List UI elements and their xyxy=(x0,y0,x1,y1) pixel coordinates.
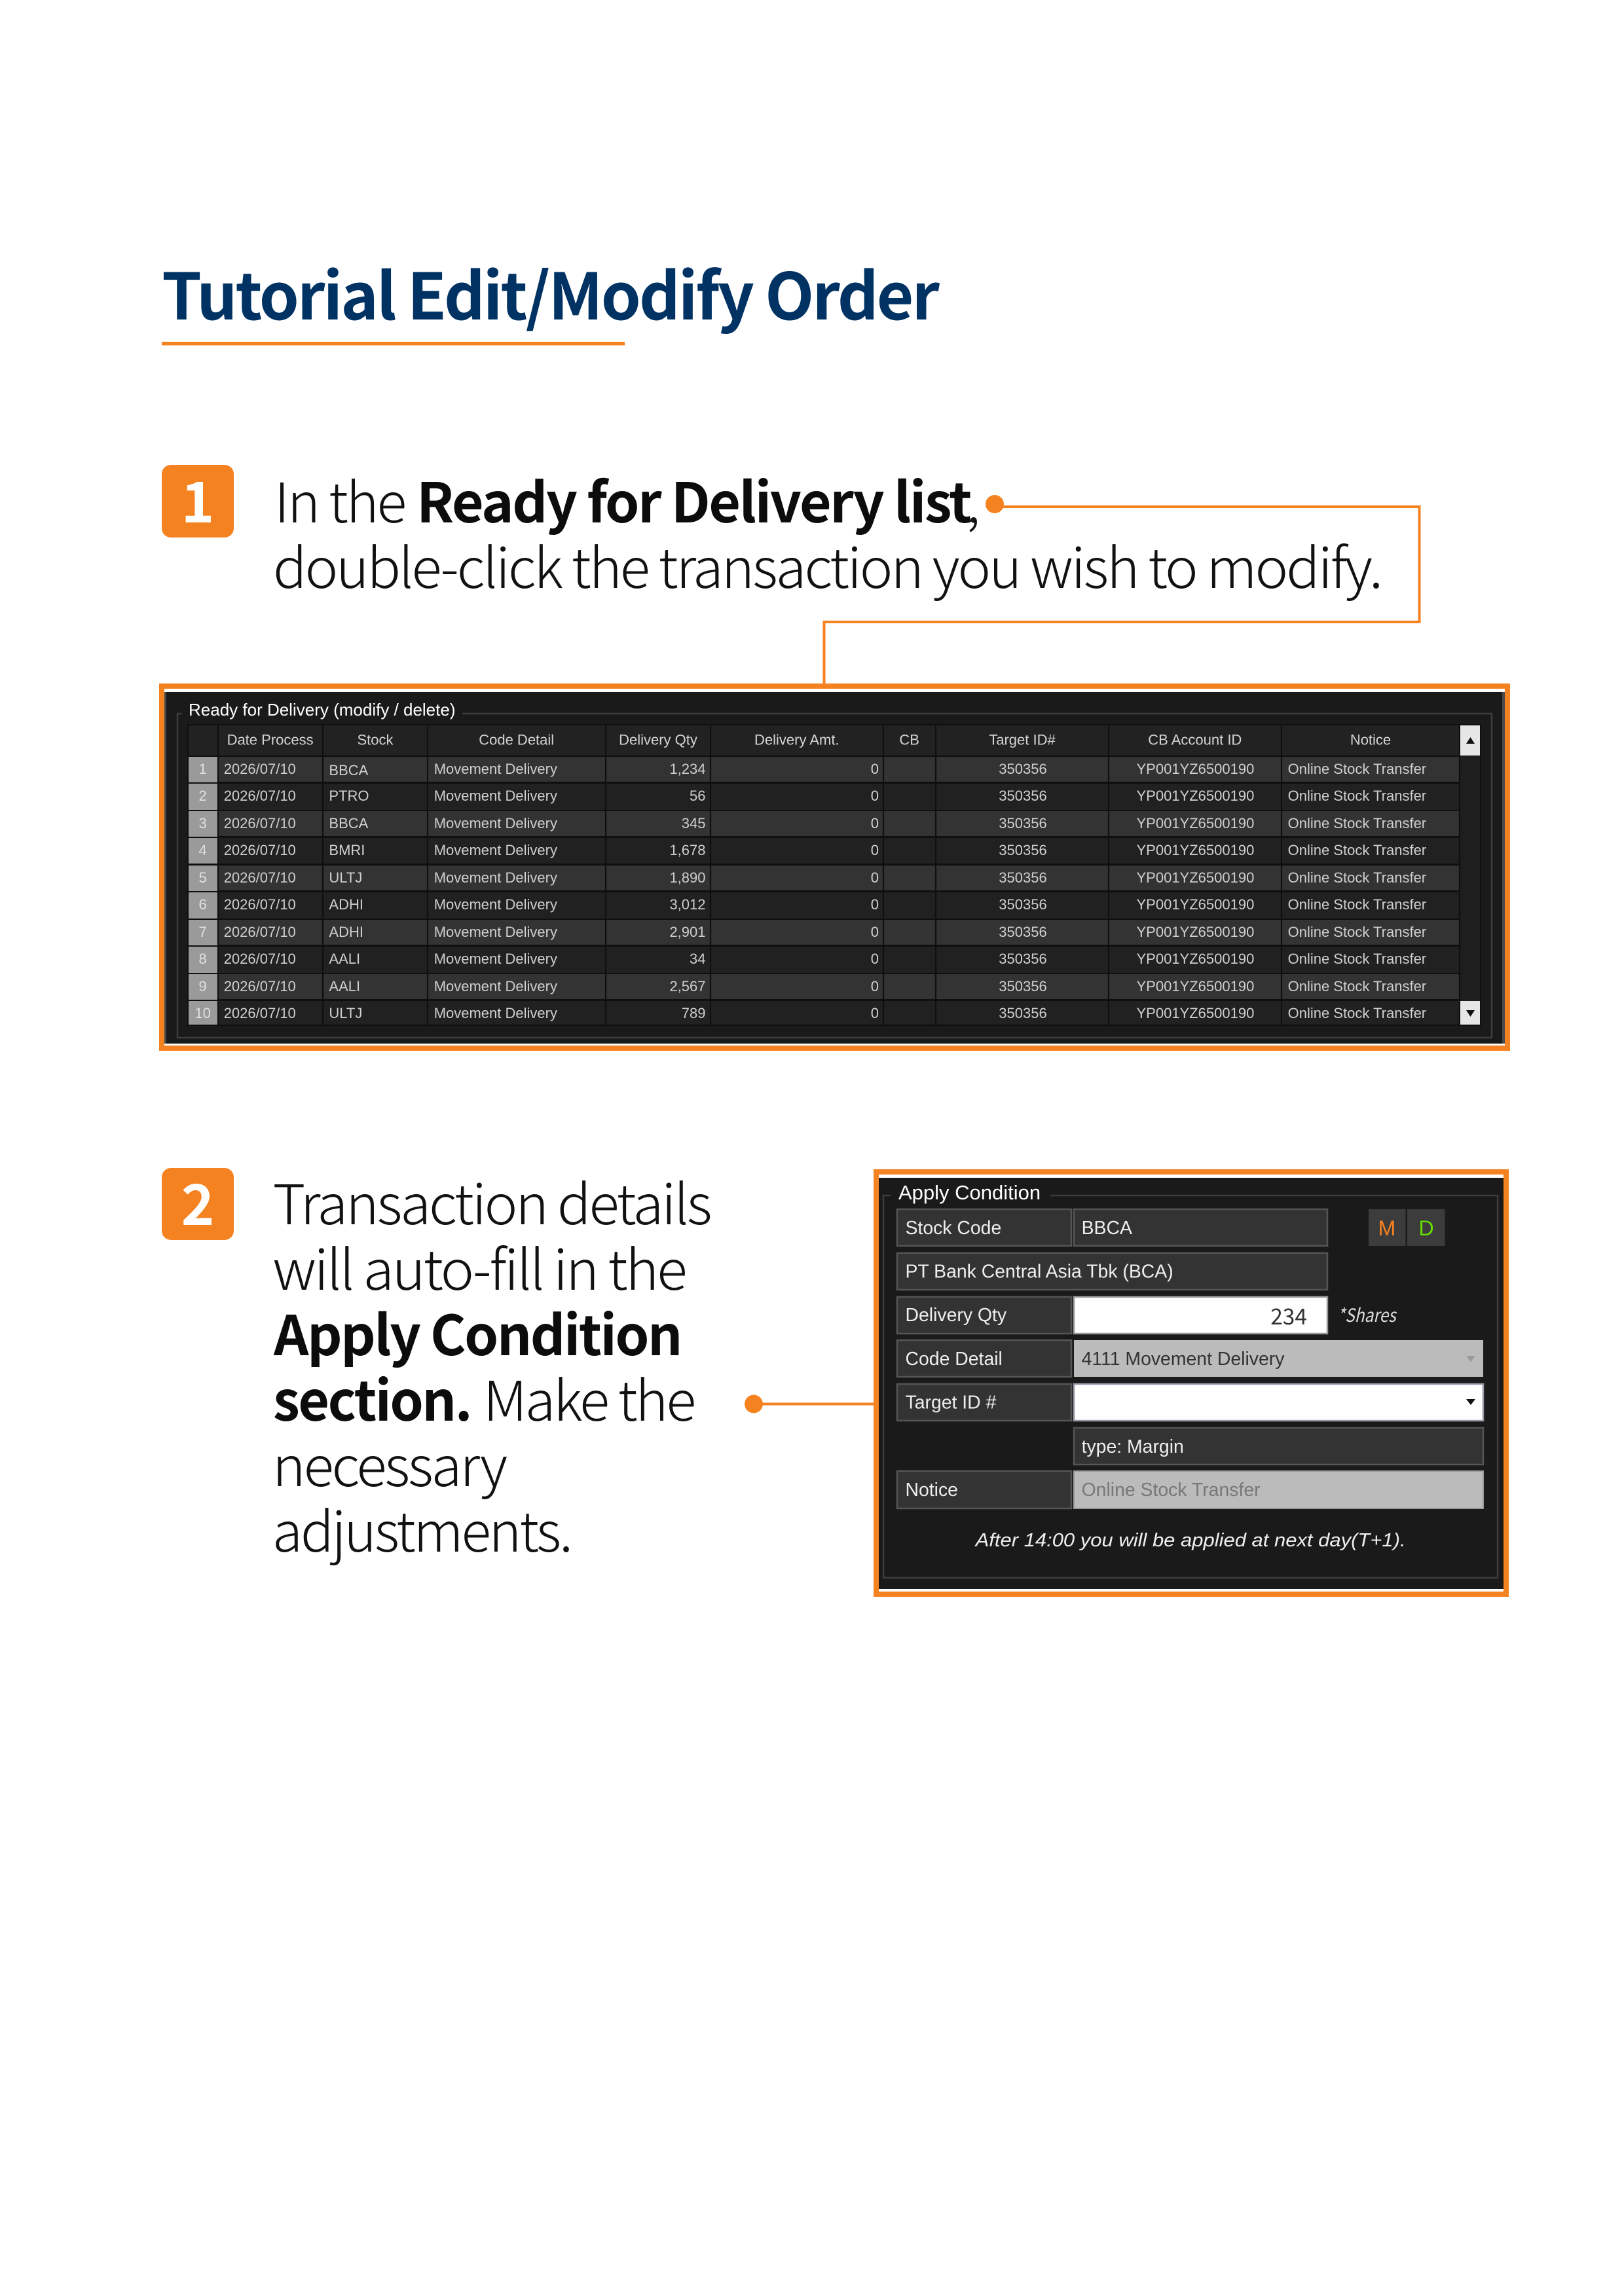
table row 8: 8 xyxy=(198,951,207,967)
table row 4 xyxy=(198,842,1426,858)
table header: CB xyxy=(899,732,919,748)
table row 4: 1,678 xyxy=(669,842,706,858)
table row 3: BBCA xyxy=(329,815,369,831)
arrow: connector from step 2 text to apply condition panel xyxy=(745,1394,874,1413)
table row 3: 345 xyxy=(682,815,706,831)
table row 5: 5 xyxy=(198,869,207,886)
table row 5 xyxy=(198,869,1426,886)
step 2 instruction text: adjustments. xyxy=(272,1489,571,1568)
title: Tutorial Edit/Modify Order xyxy=(162,246,940,338)
table row 9: AALI xyxy=(329,978,360,994)
table row 1: YP001YZ6500190 xyxy=(1136,761,1254,777)
table header: Delivery Qty xyxy=(619,732,697,748)
table row 8: 0 xyxy=(871,951,879,967)
table row 4: Movement Delivery xyxy=(434,842,557,858)
panel heading: Ready for Delivery (modify / delete) xyxy=(189,700,455,720)
table row 6: 0 xyxy=(871,896,879,913)
step 1 instruction text xyxy=(273,460,1381,604)
table row 3: 2026/07/10 xyxy=(224,815,296,831)
field: delivery qty: 234 xyxy=(1270,1299,1307,1331)
table row 9: 350356 xyxy=(999,978,1047,994)
table row 7: Online Stock Transfer xyxy=(1288,924,1426,940)
table row 4: 0 xyxy=(871,842,879,858)
table row 2: 350356 xyxy=(999,788,1047,804)
table row 1: 2026/07/10 xyxy=(224,761,296,777)
table row 10 xyxy=(194,1005,1426,1021)
table row 1: 350356 xyxy=(999,761,1047,777)
table row 9: 0 xyxy=(871,978,879,994)
table row 8: 34 xyxy=(690,951,706,967)
arrow: connector from step 1 text to delivery list xyxy=(824,495,1420,683)
table row 7: Movement Delivery xyxy=(434,924,557,940)
table row 4: 2026/07/10 xyxy=(224,842,296,858)
table row 5: ULTJ xyxy=(329,869,362,886)
table row 2 xyxy=(198,788,1426,804)
table row 2: 2 xyxy=(198,788,207,804)
table row 2: 56 xyxy=(690,788,706,804)
table row 2: Online Stock Transfer xyxy=(1288,788,1426,804)
table row 7: YP001YZ6500190 xyxy=(1136,924,1254,940)
table row 1: Movement Delivery xyxy=(434,761,557,777)
table xyxy=(187,724,1481,1026)
step 2 instruction text: Make the xyxy=(483,1358,694,1437)
form fields xyxy=(897,1209,1483,1508)
table row 5: Online Stock Transfer xyxy=(1288,869,1426,886)
field: stock code: Stock Code xyxy=(905,1218,1001,1239)
icon: scroll up button xyxy=(1460,725,1480,756)
table row 6: 350356 xyxy=(999,896,1047,913)
table row 7: 2026/07/10 xyxy=(224,924,296,940)
table row 9: 2026/07/10 xyxy=(224,978,296,994)
step 1 instruction text: , xyxy=(967,460,978,539)
table header: Delivery Amt. xyxy=(754,732,840,748)
table row 2: YP001YZ6500190 xyxy=(1136,788,1254,804)
table header xyxy=(227,732,1391,748)
table row 10: 10 xyxy=(194,1005,211,1021)
table row 3: 3 xyxy=(198,815,207,831)
table row 9: 2,567 xyxy=(669,978,706,994)
table row 10: 0 xyxy=(871,1005,879,1021)
field: stock code: BBCA xyxy=(1082,1218,1132,1239)
table row 4: BMRI xyxy=(329,842,365,858)
step 1 instruction text: Ready for Delivery list xyxy=(416,460,971,539)
step 1 instruction text: double-click the transaction you wish to modify. xyxy=(273,525,1381,604)
table header: CB Account ID xyxy=(1148,732,1242,748)
panel: apply condition xyxy=(874,1169,1509,1597)
table row 7: 7 xyxy=(198,924,207,940)
step 2 instruction text: Transaction details xyxy=(272,1161,710,1241)
table row 4: 350356 xyxy=(999,842,1047,858)
table row 6: Movement Delivery xyxy=(434,896,557,913)
table row 3: 0 xyxy=(871,815,879,831)
field: delivery qty: Delivery Qty xyxy=(905,1305,1007,1326)
step 1 instruction text: In the xyxy=(274,460,405,539)
table row 7: ADHI xyxy=(329,924,363,940)
table row 6: 3,012 xyxy=(669,896,706,913)
step 2 instruction text: section. xyxy=(273,1358,471,1437)
table row 2: 2026/07/10 xyxy=(224,788,296,804)
field: notice: Online Stock Transfer xyxy=(1082,1480,1261,1501)
footnote: After 14:00 you will be applied at next day(T+1). xyxy=(974,1530,1406,1551)
table row 9: Online Stock Transfer xyxy=(1288,978,1426,994)
table row 8: 350356 xyxy=(999,951,1047,967)
field: delivery qty xyxy=(897,1297,1397,1334)
table row 6 xyxy=(198,896,1426,913)
table row 2: PTRO xyxy=(329,788,369,804)
table row 5: 2026/07/10 xyxy=(224,869,296,886)
table row 1: 1,234 xyxy=(669,761,706,777)
table row 3 xyxy=(198,815,1426,831)
icon: scroll down button xyxy=(1460,1001,1480,1025)
table row 9: 9 xyxy=(198,978,207,994)
table row 8: AALI xyxy=(329,951,360,967)
table row 10: YP001YZ6500190 xyxy=(1136,1005,1254,1021)
table row 9: YP001YZ6500190 xyxy=(1136,978,1254,994)
table row 10: ULTJ xyxy=(329,1005,362,1021)
table header: Notice xyxy=(1350,732,1391,748)
table row 8: 2026/07/10 xyxy=(224,951,296,967)
step 2 instruction text: Apply Condition xyxy=(273,1292,681,1372)
table row 2: 0 xyxy=(871,788,879,804)
table row 6: YP001YZ6500190 xyxy=(1136,896,1254,913)
table row 1: Online Stock Transfer xyxy=(1288,761,1426,777)
step 1 badge xyxy=(162,457,234,539)
buttons: M and D: D xyxy=(1418,1216,1434,1240)
table row 5: YP001YZ6500190 xyxy=(1136,869,1254,886)
table row 3: 350356 xyxy=(999,815,1047,831)
table header: Code Detail xyxy=(479,732,554,748)
table row 2: Movement Delivery xyxy=(434,788,557,804)
table row 3: YP001YZ6500190 xyxy=(1136,815,1254,831)
table row 10: Movement Delivery xyxy=(434,1005,557,1021)
field: notice xyxy=(897,1471,1483,1508)
step 2 badge xyxy=(162,1159,234,1241)
table row 3: Online Stock Transfer xyxy=(1288,815,1426,831)
table row 5: 350356 xyxy=(999,869,1047,886)
table row 1 xyxy=(198,761,1426,778)
table row 1: 0 xyxy=(871,761,879,777)
panel heading: Apply Condition xyxy=(898,1181,1041,1204)
table row 10: Online Stock Transfer xyxy=(1288,1005,1426,1021)
table row 10: 2026/07/10 xyxy=(224,1005,296,1021)
field: type margin xyxy=(1074,1428,1483,1465)
buttons: M and D: M xyxy=(1378,1216,1395,1240)
field: company name xyxy=(897,1253,1327,1290)
field: code detail: Code Detail xyxy=(905,1349,1003,1370)
table row 8: Online Stock Transfer xyxy=(1288,951,1426,967)
table header: Date Process xyxy=(227,732,314,748)
step 2 instruction text: necessary xyxy=(272,1423,507,1503)
table row 7 xyxy=(198,924,1426,940)
field: notice: Notice xyxy=(905,1480,958,1501)
table row 10: 350356 xyxy=(999,1005,1047,1021)
field: type margin: type: Margin xyxy=(1082,1436,1184,1457)
field: code detail xyxy=(897,1340,1483,1377)
title underline xyxy=(162,342,625,346)
table row 8: Movement Delivery xyxy=(434,951,557,967)
step 2 instruction text xyxy=(272,1161,710,1568)
field: code detail: 4111 Movement Delivery xyxy=(1082,1349,1285,1370)
table row 5: Movement Delivery xyxy=(434,869,557,886)
table row 10: 789 xyxy=(682,1005,706,1021)
field: stock code xyxy=(897,1209,1327,1246)
table header: Target ID# xyxy=(989,732,1056,748)
table row 1: BBCA xyxy=(329,762,369,778)
panel: ready for delivery list xyxy=(159,683,1510,1051)
buttons: M and D xyxy=(1369,1209,1445,1246)
table row 1: 1 xyxy=(198,761,207,777)
field: target id xyxy=(897,1384,1483,1421)
table row 4: Online Stock Transfer xyxy=(1288,842,1426,858)
table row 6: ADHI xyxy=(329,896,363,913)
table row 3: Movement Delivery xyxy=(434,815,557,831)
table row 5: 0 xyxy=(871,869,879,886)
table row 9 xyxy=(198,978,1426,994)
table row 4: YP001YZ6500190 xyxy=(1136,842,1254,858)
table row 6: Online Stock Transfer xyxy=(1288,896,1426,913)
table row 6: 2026/07/10 xyxy=(224,896,296,913)
field: company name: PT Bank Central Asia Tbk (BCA) xyxy=(905,1261,1173,1282)
table row 8 xyxy=(198,951,1426,967)
field: delivery qty: *Shares xyxy=(1338,1302,1397,1328)
field: target id: Target ID # xyxy=(905,1392,997,1413)
step 2 instruction text: will auto-fill in the xyxy=(272,1227,685,1306)
table row 7: 350356 xyxy=(999,924,1047,940)
table row 6: 6 xyxy=(198,896,207,913)
table row 5: 1,890 xyxy=(669,869,706,886)
table row 7: 0 xyxy=(871,924,879,940)
table header: Stock xyxy=(357,732,394,748)
step 2 badge: 2 xyxy=(181,1159,214,1241)
table row 9: Movement Delivery xyxy=(434,978,557,994)
table row 8: YP001YZ6500190 xyxy=(1136,951,1254,967)
step 1 badge: 1 xyxy=(181,457,214,539)
table row 7: 2,901 xyxy=(669,924,706,940)
table row 4: 4 xyxy=(198,842,207,858)
